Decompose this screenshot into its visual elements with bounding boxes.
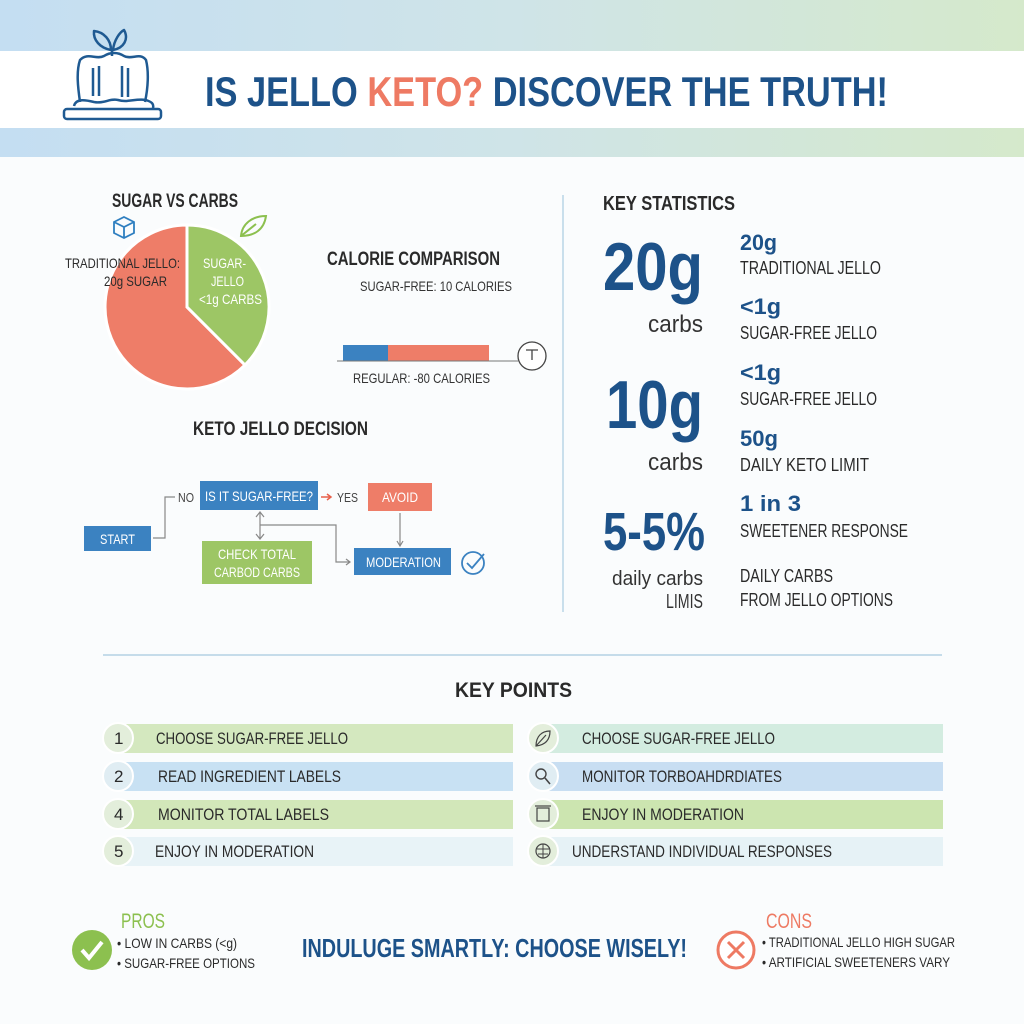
panel: pros (72, 910, 255, 971)
stat: 10g: carbs (648, 449, 703, 476)
stat: 10g: 10g (606, 367, 703, 443)
stat list: DAILY KETO LIMIT (740, 455, 869, 475)
point 2 (103, 761, 513, 791)
heading: key points: KEY POINTS (455, 679, 572, 702)
panel: sugar vs carbs (65, 191, 269, 389)
label: sugar-free: JELLO (211, 273, 244, 289)
stat list: TRADITIONAL JELLO (740, 258, 881, 278)
point: leaf (528, 723, 943, 753)
label: sugar-free: SUGAR- (203, 255, 246, 271)
stat list: SWEETENER RESPONSE (740, 521, 908, 541)
label: traditional: 20g SUGAR (104, 273, 167, 289)
stat: 20g: 20g (603, 229, 703, 305)
point 2: 2 (114, 767, 123, 786)
stat list: 20g (740, 230, 777, 255)
heading: calorie comparison: CALORIE COMPARISON (327, 249, 500, 270)
stat: 20g (603, 229, 703, 338)
stat: 5-5%: daily carbs (612, 568, 703, 590)
label: traditional (65, 255, 180, 289)
stat: 20g: carbs (648, 311, 703, 338)
point 4: 4 (114, 805, 123, 824)
panel: pros: • SUGAR-FREE OPTIONS (117, 955, 255, 971)
panel: pros: • LOW IN CARBS (<g) (117, 935, 237, 951)
panel: cons: • TRADITIONAL JELLO HIGH SUGAR (762, 934, 955, 950)
point: leaf: CHOOSE SUGAR-FREE JELLO (582, 729, 775, 748)
icon: cube (114, 217, 134, 238)
header band (0, 0, 1024, 157)
panel: pros: PROS (121, 910, 165, 933)
point 4 (103, 799, 513, 829)
point 2: READ INGREDIENT LABELS (158, 767, 341, 786)
point: scale: ENJOY IN MODERATION (582, 805, 744, 824)
stat list: 50g (740, 426, 778, 451)
heading: decision: KETO JELLO DECISION (193, 419, 368, 440)
panel: key points (103, 679, 943, 866)
stat: 5-5%: LIMIS (666, 591, 703, 613)
box: start: START (100, 531, 135, 547)
label: sugar-free: <1g CARBS (199, 291, 262, 307)
point 1: CHOOSE SUGAR-FREE JELLO (156, 729, 348, 748)
stat list: SUGAR-FREE JELLO (740, 323, 877, 343)
panel: calorie comparison (327, 249, 546, 386)
panel: key statistics (603, 193, 908, 613)
box: moderation: MODERATION (366, 554, 441, 570)
stat list: <1g (740, 294, 781, 319)
box: start (84, 526, 151, 551)
point: magnifier (528, 761, 943, 791)
box: is it sugar-free: IS IT SUGAR-FREE? (205, 488, 313, 504)
point 1 (103, 723, 513, 753)
arrow: yes (321, 490, 358, 505)
icon: jello (64, 30, 161, 119)
point: scale (528, 799, 943, 829)
point 5: ENJOY IN MODERATION (155, 842, 314, 861)
bar chart (337, 342, 546, 370)
stat: 5-5% (603, 502, 705, 613)
point: brain: UNDERSTAND INDIVIDUAL RESPONSES (572, 842, 832, 861)
box: avoid: AVOID (382, 489, 418, 505)
arrow: yes: YES (337, 490, 358, 505)
title: IS JELLO KETO? DISCOVER THE TRUTH! (205, 68, 888, 115)
box: check total (202, 541, 312, 584)
box: avoid (368, 483, 432, 511)
icon: x circle (718, 932, 754, 968)
box: is it sugar-free (200, 481, 318, 510)
stat list (740, 230, 908, 610)
point 1: 1 (114, 729, 123, 748)
box: moderation (354, 548, 451, 575)
panel: cons: CONS (766, 910, 812, 933)
box: check total: CARBOD CARBS (214, 564, 300, 580)
panel: calorie comparison: REGULAR: -80 CALORIES (353, 370, 490, 386)
panel: cons (718, 910, 955, 970)
slogan: INDULUGE SMARTLY: CHOOSE WISELY! (302, 933, 687, 963)
stat list: SUGAR-FREE JELLO (740, 389, 877, 409)
stat: 10g (606, 367, 703, 476)
point 5: 5 (114, 842, 123, 861)
panel: keto jello decision flowchart: NO (178, 490, 194, 505)
icon: check (462, 552, 484, 574)
panel: calorie comparison: SUGAR-FREE: 10 CALORIES (360, 278, 512, 294)
heading: key statistics: KEY STATISTICS (603, 193, 735, 215)
point: magnifier: MONITOR TORBOAHDRDIATES (582, 767, 782, 786)
icon: check circle (72, 930, 112, 970)
stat: 5-5%: 5-5% (603, 502, 705, 562)
point 5 (103, 836, 513, 866)
stat list: 1 in 3 (740, 491, 801, 516)
box: check total: CHECK TOTAL (218, 546, 296, 562)
point 4: MONITOR TOTAL LABELS (158, 805, 329, 824)
panel: cons: • ARTIFICIAL SWEETENERS VARY (762, 954, 951, 970)
stat list: DAILY CARBS (740, 566, 833, 586)
heading: sugar vs carbs: SUGAR VS CARBS (112, 191, 238, 212)
stat list: <1g (740, 360, 781, 385)
point: brain (528, 836, 943, 866)
label: traditional: TRADITIONAL JELLO: (65, 255, 180, 271)
pie chart (105, 225, 269, 389)
label: sugar-free (199, 255, 262, 307)
panel: keto jello decision flowchart (84, 419, 484, 584)
stat list: FROM JELLO OPTIONS (740, 590, 893, 610)
icon: leaf (241, 216, 266, 236)
